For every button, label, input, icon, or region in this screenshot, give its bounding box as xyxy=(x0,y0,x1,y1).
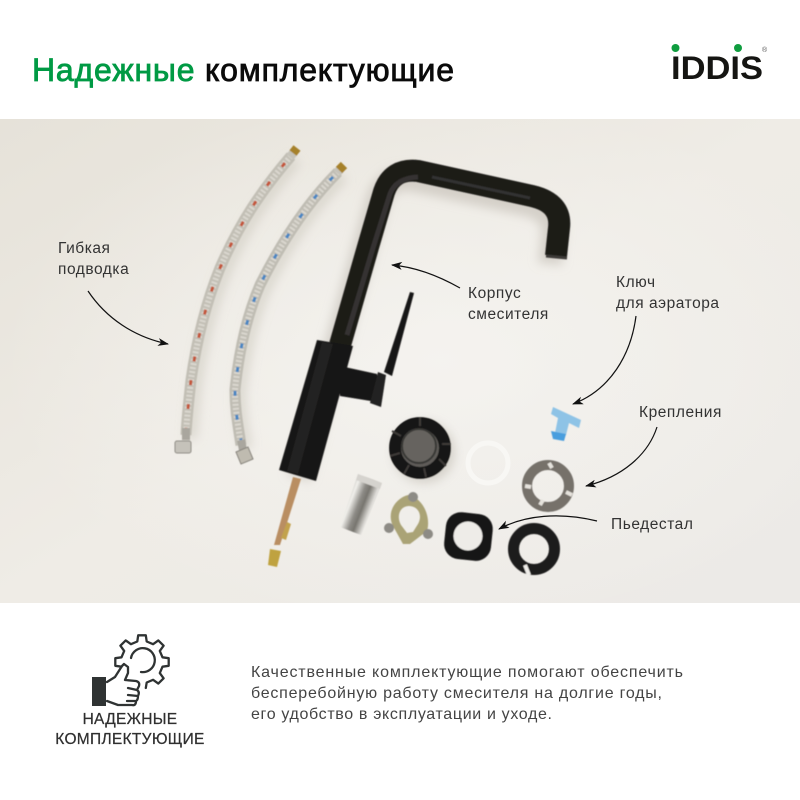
arrow: flexible hose xyxy=(88,291,168,344)
photo: brass bracket xyxy=(384,492,433,544)
photo: flexible hoses xyxy=(175,148,344,464)
label: flexible hose: подводка xyxy=(58,261,129,278)
icon caption: НАДЕЖНЫЕ xyxy=(83,711,177,728)
photo: black ribbed sleeve xyxy=(390,417,455,483)
icon: thumbs up and gear xyxy=(92,635,169,706)
photo: mounting rod xyxy=(268,477,301,567)
description text: бесперебойную работу смесителя на долгие годы, xyxy=(251,685,662,702)
description text: Качественные комплектующие помогают обеспечить xyxy=(251,664,683,681)
photo: chrome sleeve xyxy=(340,474,382,535)
logo: IDDIS: IDDIS xyxy=(671,50,763,86)
label: pedestal: Пьедестал xyxy=(611,516,693,533)
photo: blue aerator key xyxy=(551,407,581,441)
label: aerator key: Ключ xyxy=(616,274,656,291)
label: faucet body: Корпус xyxy=(468,285,521,302)
logo: IDDIS: ® xyxy=(762,46,768,54)
label: fasteners: Крепления xyxy=(639,404,722,421)
icon part: gear xyxy=(115,635,169,688)
icon part: gear inner arc xyxy=(131,648,155,672)
arrow: faucet body xyxy=(392,265,460,288)
photo: faucet shadow xyxy=(299,179,553,478)
label: faucet body: смесителя xyxy=(468,306,549,323)
arrow: aerator key xyxy=(573,316,636,404)
arrow: fasteners xyxy=(586,427,657,486)
label: flexible hose: Гибкая xyxy=(58,240,110,257)
photo: square black gasket xyxy=(443,511,494,562)
arrow: pedestal xyxy=(499,516,597,529)
label: aerator key: для аэратора xyxy=(616,295,720,312)
photo: round black gasket xyxy=(514,528,554,575)
photo: metal washer xyxy=(525,463,572,507)
icon caption: КОМПЛЕКТУЮЩИЕ xyxy=(55,731,205,748)
photo: white plastic ring xyxy=(468,443,508,483)
icon part: cuff xyxy=(92,677,106,706)
description text: его удобство в эксплуатации и уходе. xyxy=(251,706,552,723)
photo: black faucet body xyxy=(279,171,567,481)
title: Надежные комплектующие xyxy=(32,52,454,88)
icon part: hand xyxy=(107,664,139,705)
panel: product photo xyxy=(0,119,800,603)
